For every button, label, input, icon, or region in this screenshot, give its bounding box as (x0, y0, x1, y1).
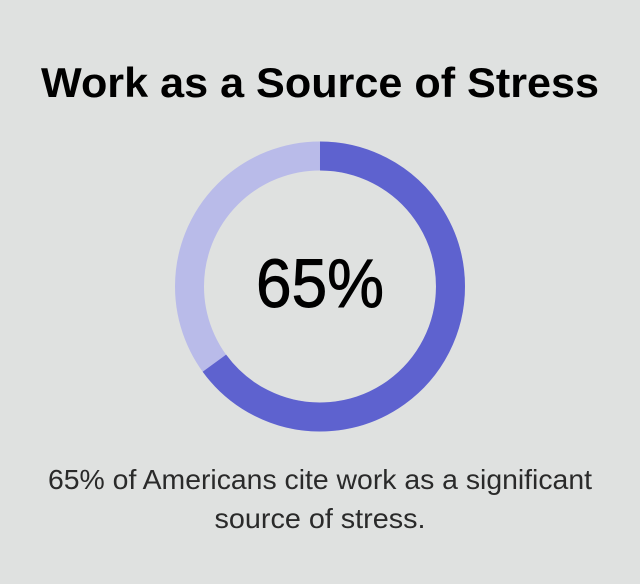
description (48, 464, 592, 534)
center value: 65% (256, 245, 384, 322)
description: 65% of Americans cite work as a significant (48, 464, 592, 495)
remaining segment (190, 156, 450, 417)
title: Work as a Source of Stress (41, 59, 599, 106)
description: source of stress. (214, 503, 426, 534)
65% segment (214, 156, 450, 417)
donut chart (190, 156, 450, 417)
